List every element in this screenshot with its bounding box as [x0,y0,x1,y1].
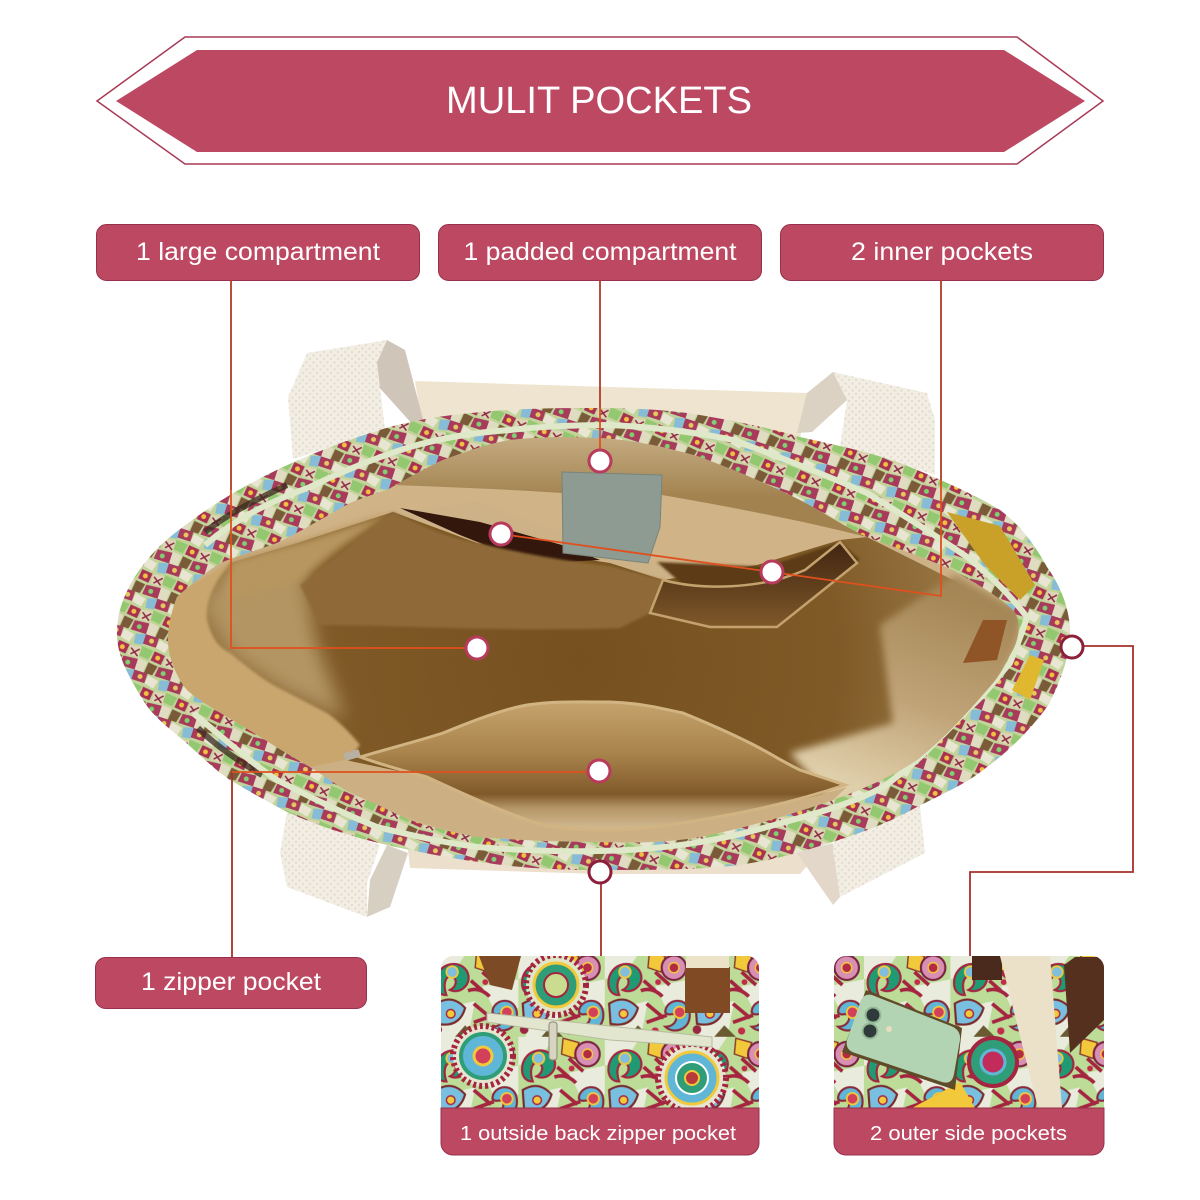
left top strap [288,340,424,459]
leader: back zipper pocket [600,872,602,957]
left floor highlight [203,552,345,720]
padded compartment back wall [387,437,867,537]
label: 1 zipper pocket: 1 zipper pocket [141,968,321,996]
label: 2 inner pockets: 2 inner pockets [851,238,1033,266]
zipper shadows [198,485,287,775]
label: 2 inner pockets [780,224,1104,280]
caption bar: 2 outer side pockets [870,1122,1067,1145]
large slanted inner pocket [300,512,663,629]
main compartment floor [206,512,954,800]
leader: large compartment [231,280,477,648]
large paisley motifs [453,955,726,1112]
padded compartment flap [222,485,866,562]
bag photo [117,340,1070,917]
label: 1 zipper pocket [96,958,366,1008]
right side wall [790,575,1021,805]
caption bar [834,1108,1104,1155]
brown leather patch [1064,957,1104,1053]
title: MULIT POCKETS [446,80,752,122]
label: 1 padded compartment [438,224,762,280]
zipper pull [549,1022,557,1060]
left upper wall [229,514,388,582]
yellow side motifs [947,512,1044,700]
label: 1 padded compartment: 1 padded compartment [464,238,737,266]
front zipper pocket [360,702,845,830]
canvas strap [1000,956,1062,1108]
dark opening behind the left pocket [400,508,600,562]
strip below front pocket [310,760,847,840]
right bottom strap [797,805,925,905]
leader: inner pockets [501,280,941,596]
label: 1 large compartment [96,224,420,280]
right pocket back shadow [657,542,860,600]
fabric photo [834,956,1104,1108]
top dark patch [972,956,1002,980]
leather patches [479,956,521,990]
leather tab [963,620,1007,663]
patterned rim [117,408,1070,870]
phone [842,990,962,1090]
mandala motif [912,1038,1017,1108]
right top strap [797,372,935,475]
bottom back panel [408,850,812,874]
right inner pocket [650,542,857,627]
leader: side pockets [970,646,1133,957]
caption bar [441,1108,759,1155]
left side wall [165,562,360,772]
leader: padded compartment [599,280,601,461]
zipper slider [343,749,361,761]
caption bar: 1 outside back zipper pocket [460,1122,736,1145]
zipper [487,1013,712,1047]
back top panel [415,381,807,440]
zipper band [193,425,1027,851]
panel: outer side pockets [834,956,1104,1155]
bag lining [160,430,1030,850]
left bottom strap [280,812,408,917]
panel: outside back zipper pocket [441,955,759,1155]
leader: zipper pocket [232,772,599,957]
label: 1 large compartment: 1 large compartment [136,238,380,266]
fabric photo [441,955,759,1112]
marker dots [466,450,1083,883]
title banner [97,37,1103,164]
velcro tab [562,472,662,563]
